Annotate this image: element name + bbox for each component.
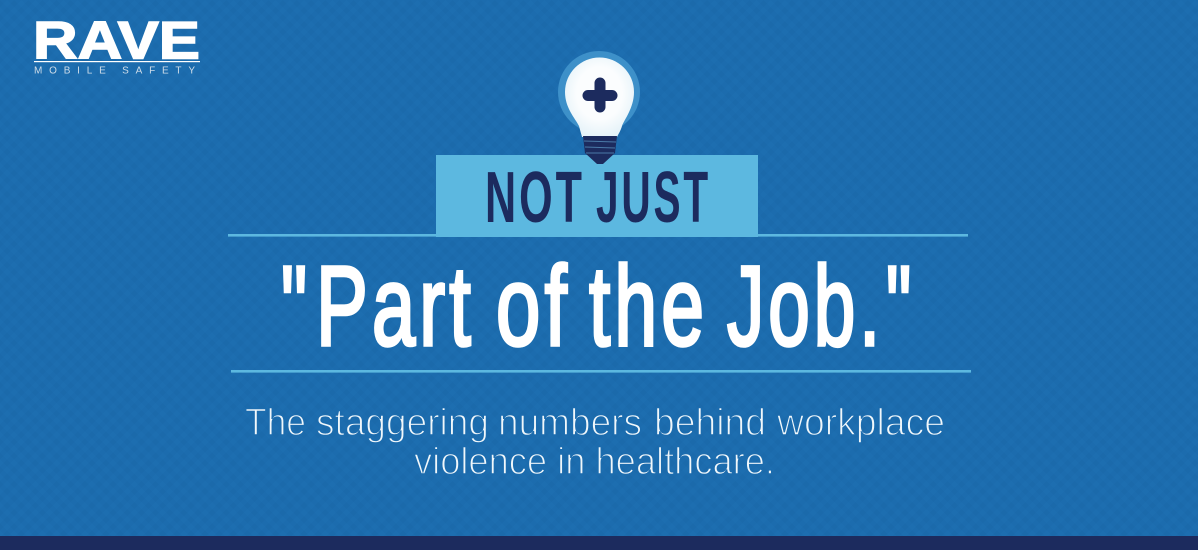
banner box: Not Just: JUST bbox=[596, 158, 711, 238]
top rule bbox=[228, 234, 968, 237]
title: Part of the Job bbox=[281, 243, 915, 369]
title: Part of the Job: Part bbox=[316, 243, 475, 369]
subtitle: numbers bbox=[498, 402, 642, 444]
title: Part of the Job: " bbox=[281, 243, 311, 369]
logo: Rave Mobile Safety: RAVE bbox=[33, 12, 200, 70]
logo: Rave Mobile Safety: MOBILE SAFETY bbox=[34, 65, 195, 76]
subtitle: The bbox=[245, 402, 306, 444]
title: Part of the Job: Job. bbox=[727, 243, 884, 369]
subtitle bbox=[245, 402, 945, 483]
subtitle: staggering bbox=[316, 402, 489, 444]
title: Part of the Job: of bbox=[496, 243, 571, 369]
bottom band bbox=[0, 536, 1198, 550]
banner box: Not Just bbox=[436, 155, 758, 238]
banner box: Not Just: NOT bbox=[485, 158, 585, 238]
subtitle: workplace bbox=[776, 402, 945, 444]
icon: light bulb with medical cross bbox=[558, 51, 640, 164]
subtitle: violence in healthcare. bbox=[414, 441, 775, 483]
title: Part of the Job: " bbox=[886, 243, 915, 369]
subtitle: behind bbox=[654, 402, 766, 444]
title: Part of the Job: the bbox=[589, 243, 708, 369]
bottom rule bbox=[231, 370, 971, 373]
